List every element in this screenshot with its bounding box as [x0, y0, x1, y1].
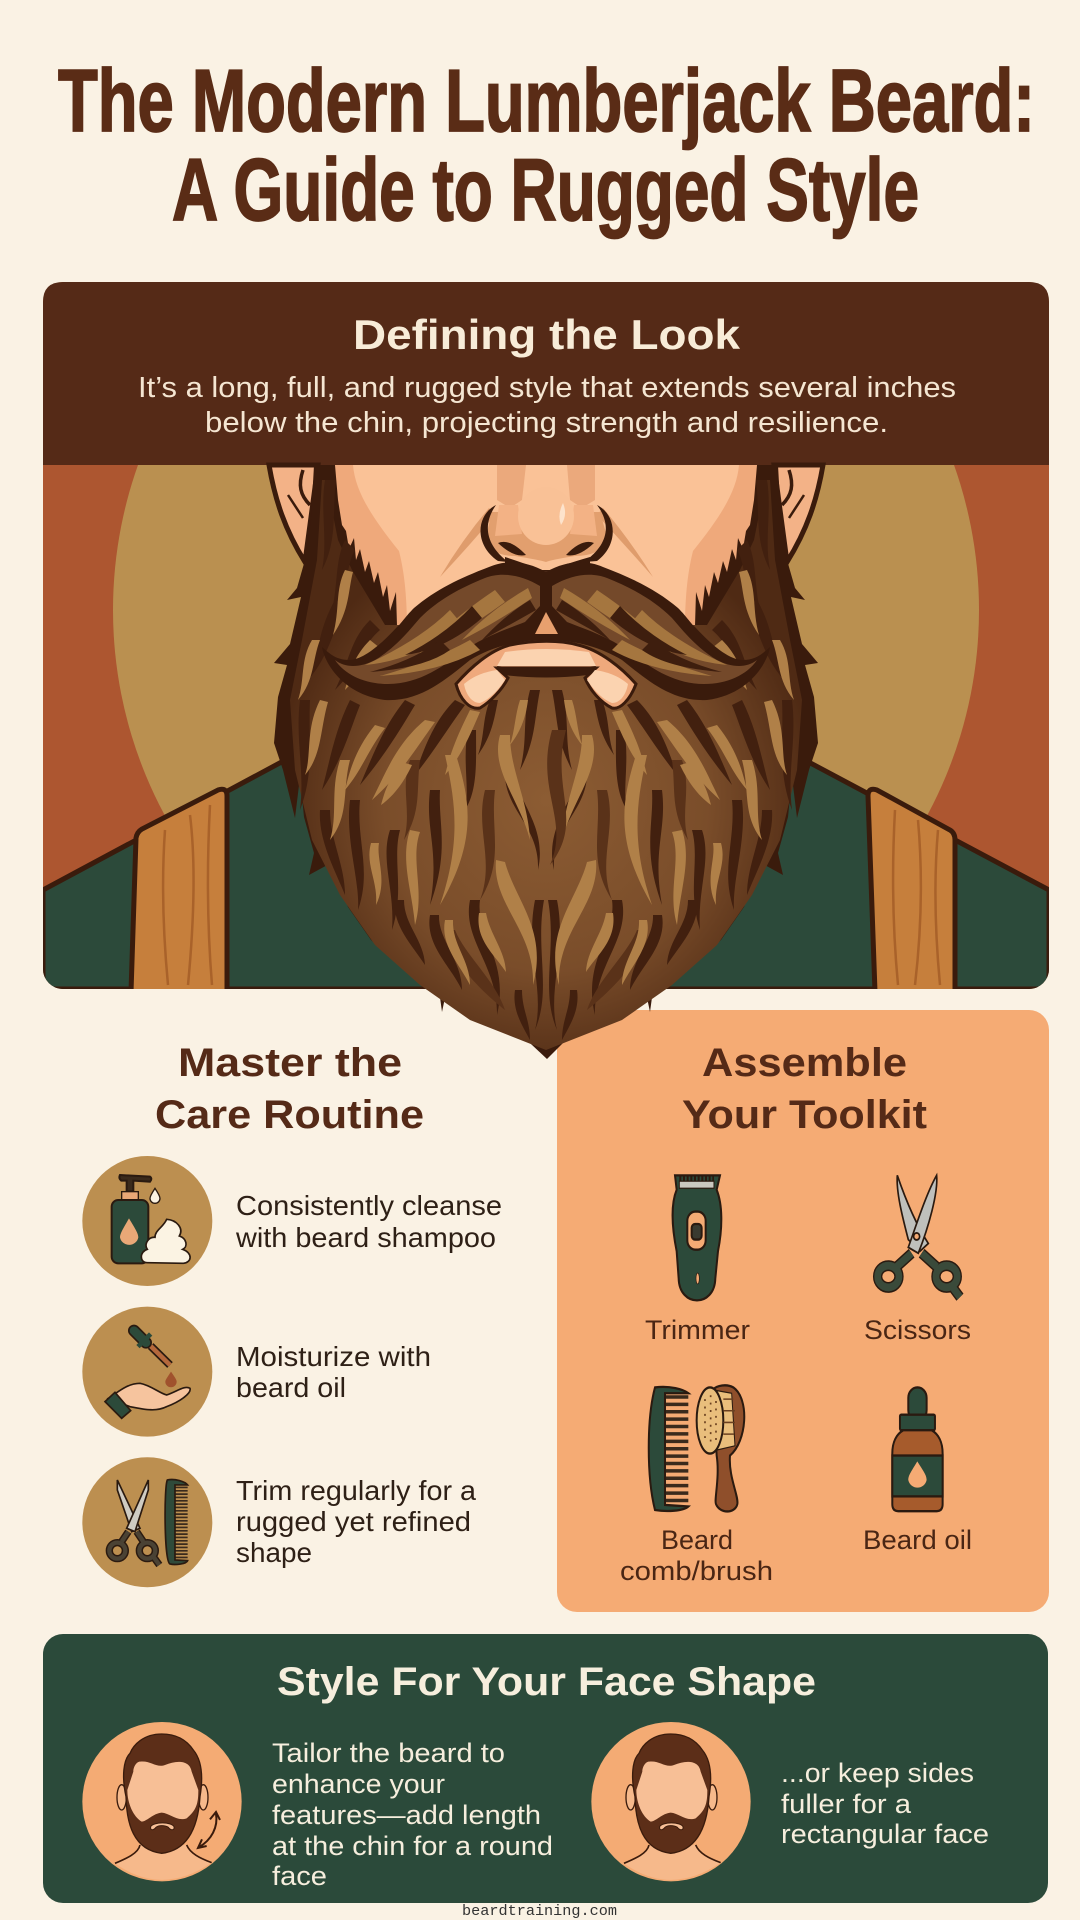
heading: assemble your toolkit — [682, 1041, 927, 1137]
beard illustration — [269, 465, 823, 1059]
heading: master the care routine: Care Routine — [155, 1093, 424, 1137]
icon: scissors — [878, 1175, 960, 1297]
panel: assemble your toolkit — [557, 1010, 1049, 1612]
arrow: add length — [198, 1812, 220, 1848]
text: keep sides fuller: rectangular face — [781, 1819, 989, 1849]
mustache — [322, 562, 770, 700]
icon: rectangular face with beard — [591, 1722, 751, 1881]
text: keep sides fuller: ...or keep sides — [781, 1758, 974, 1788]
heading: assemble your toolkit: Your Toolkit — [682, 1093, 927, 1137]
icon: trimmer — [673, 1175, 721, 1300]
heading: master the care routine: Master the — [178, 1041, 402, 1085]
face skin — [320, 465, 772, 645]
text: trim step — [236, 1475, 476, 1568]
text: tailor the beard: Tailor the beard to — [272, 1738, 505, 1768]
panel: style for your face shape — [43, 1634, 1048, 1903]
icon: dropper and hand — [82, 1307, 212, 1437]
text: cleanse step: Consistently cleanse — [236, 1190, 502, 1221]
text: trim step: Trim regularly for a — [236, 1475, 476, 1506]
icon: beard comb and brush — [649, 1385, 744, 1511]
label: beard oil: Beard oil — [863, 1525, 972, 1555]
text: tailor the beard: at the chin for a round — [272, 1831, 553, 1861]
label: scissors: Scissors — [864, 1315, 971, 1345]
icon: shampoo bottle and foam — [82, 1156, 212, 1286]
nose — [480, 487, 613, 572]
text: tailor the beard — [272, 1738, 553, 1891]
heading: defining the look: Defining the Look — [353, 311, 741, 358]
label: beard comb/brush — [620, 1525, 773, 1586]
beard silhouette — [274, 465, 818, 1059]
text: tailor the beard: face — [272, 1861, 327, 1891]
text: trim step: shape — [236, 1537, 312, 1568]
icon: round face with beard — [82, 1722, 242, 1881]
icon: scissors and comb — [82, 1457, 212, 1587]
text: cleanse step: with beard shampoo — [235, 1222, 496, 1253]
text: defining the look description — [138, 372, 956, 439]
text: trim step: rugged yet refined — [236, 1506, 471, 1537]
heading: assemble your toolkit: Assemble — [702, 1041, 907, 1085]
text: keep sides fuller — [781, 1758, 989, 1849]
lips and chin — [456, 641, 636, 708]
text: moisturize step — [236, 1341, 431, 1403]
panel: beard illustration scene — [43, 282, 1049, 989]
label: beard comb/brush: comb/brush — [620, 1556, 773, 1586]
heading: style for your face shape: Style For Your Face Shape — [277, 1660, 816, 1704]
beard strands — [298, 480, 794, 1040]
text: tailor the beard: enhance your — [272, 1769, 445, 1799]
label: trimmer: Trimmer — [645, 1315, 750, 1345]
footer source: beardtraining.com — [462, 1903, 617, 1920]
text: keep sides fuller: fuller for a — [781, 1789, 912, 1819]
text: defining the look description: It’s a long, full, and rugged style that extends several inches — [138, 372, 956, 404]
beard body — [290, 480, 802, 1050]
icon: beard oil bottle — [892, 1387, 943, 1511]
label: beard comb/brush: Beard — [661, 1525, 733, 1555]
text: cleanse step — [235, 1190, 502, 1253]
text: moisturize step: beard oil — [236, 1372, 346, 1403]
ears — [269, 465, 823, 562]
title — [58, 51, 1035, 239]
panel: defining the look — [43, 282, 1049, 465]
text: tailor the beard: features—add length — [272, 1800, 541, 1830]
text: moisturize step: Moisturize with — [236, 1341, 431, 1372]
heading: master the care routine — [155, 1041, 424, 1137]
text: defining the look description: below the chin, projecting strength and resilience. — [205, 407, 888, 439]
